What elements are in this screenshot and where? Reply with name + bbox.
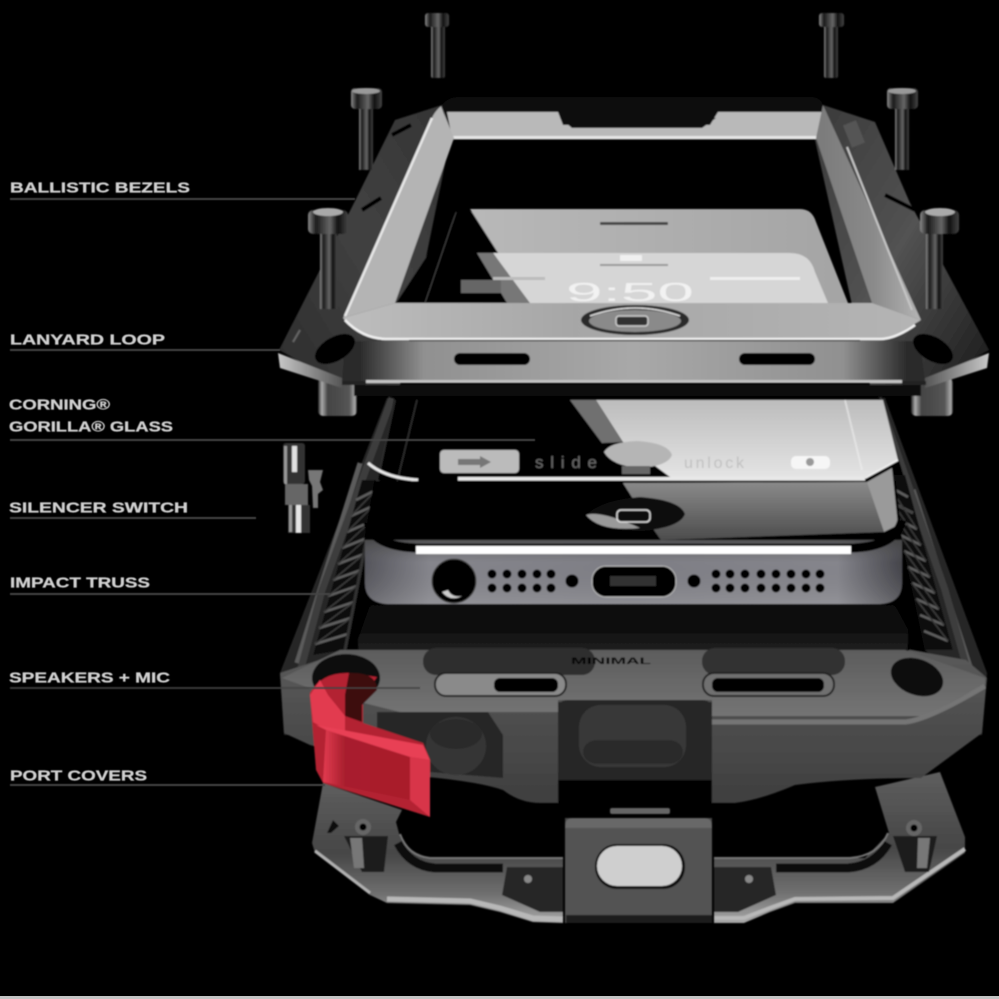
lip slots bbox=[454, 353, 530, 365]
top bezel front lip bbox=[278, 328, 989, 388]
impact truss: left bbox=[313, 480, 378, 655]
pads with printed text bbox=[423, 648, 595, 675]
case back and side walls bbox=[280, 398, 987, 735]
phone glass upper reflection: unlock bbox=[684, 455, 745, 472]
label: corning gorilla glass: GORILLA® GLASS bbox=[9, 418, 173, 436]
slide to unlock text: slide bbox=[535, 453, 597, 472]
chamfer highlight bbox=[712, 686, 985, 722]
impact truss: right bbox=[888, 475, 953, 650]
speaker holes left bbox=[488, 570, 700, 592]
case front face: MINIMAL bbox=[571, 656, 652, 666]
top bezel silver frame bbox=[343, 97, 921, 339]
port cover tab bbox=[565, 808, 712, 923]
headphone jack bbox=[432, 559, 476, 603]
lock screen clock: 9:50 bbox=[566, 277, 694, 307]
label: ballistic bezels: BALLISTIC BEZELS bbox=[10, 180, 190, 196]
center port block bbox=[558, 700, 712, 780]
exploded product illustration bbox=[278, 13, 989, 923]
bottom screw stubs bbox=[318, 378, 953, 416]
label: speakers and mic: SPEAKERS + MIC bbox=[9, 670, 170, 686]
label: port covers: PORT COVERS bbox=[10, 768, 147, 784]
label: lanyard loop: LANYARD LOOP bbox=[10, 332, 165, 348]
left silver band bbox=[343, 106, 454, 318]
case interior bbox=[358, 600, 908, 690]
speaker slot left bbox=[435, 673, 566, 696]
home button reflection bbox=[604, 441, 672, 468]
black rim of phone bbox=[368, 520, 902, 548]
bottom edge strip bbox=[0, 996, 999, 999]
corner wedges bbox=[278, 353, 342, 388]
lip lower highlight bbox=[366, 380, 902, 383]
screws: top pair bbox=[425, 13, 844, 78]
lightning port bbox=[592, 566, 676, 597]
camera icon bbox=[791, 456, 830, 469]
top bezel dark side walls bbox=[279, 105, 989, 385]
phone bottom edge bbox=[365, 520, 902, 604]
bottom plate bbox=[343, 303, 921, 339]
corner holes bbox=[310, 328, 360, 370]
slide button bbox=[440, 450, 519, 473]
corner holes bbox=[885, 651, 949, 703]
side button recess bbox=[377, 712, 503, 778]
silencer switch part bbox=[283, 443, 323, 533]
callout labels bbox=[9, 180, 535, 785]
screen seen through window bbox=[396, 209, 848, 307]
top face bbox=[282, 650, 985, 716]
speaker slot right bbox=[703, 673, 834, 696]
lower bezel frame bbox=[312, 772, 965, 923]
phone glass upper reflection bbox=[368, 400, 898, 523]
speaker slit and lock graphics bbox=[600, 222, 668, 225]
lanyard home button bbox=[581, 305, 689, 335]
under-lip shadow bbox=[354, 385, 921, 396]
case front face bbox=[280, 648, 987, 804]
screws: corner sets in front of side walls bbox=[308, 88, 959, 309]
phone glass lower bbox=[364, 468, 902, 540]
label: corning gorilla glass bbox=[9, 396, 535, 440]
small tabs with screws bbox=[502, 867, 563, 912]
right silver band bbox=[816, 105, 921, 320]
posts bbox=[344, 836, 388, 872]
label: impact truss: IMPACT TRUSS bbox=[10, 574, 150, 592]
label: corning gorilla glass: CORNING® bbox=[9, 396, 110, 414]
red port cover clip bbox=[310, 673, 430, 817]
speaker holes right bbox=[712, 570, 824, 592]
label: silencer switch: SILENCER SWITCH bbox=[9, 500, 188, 516]
